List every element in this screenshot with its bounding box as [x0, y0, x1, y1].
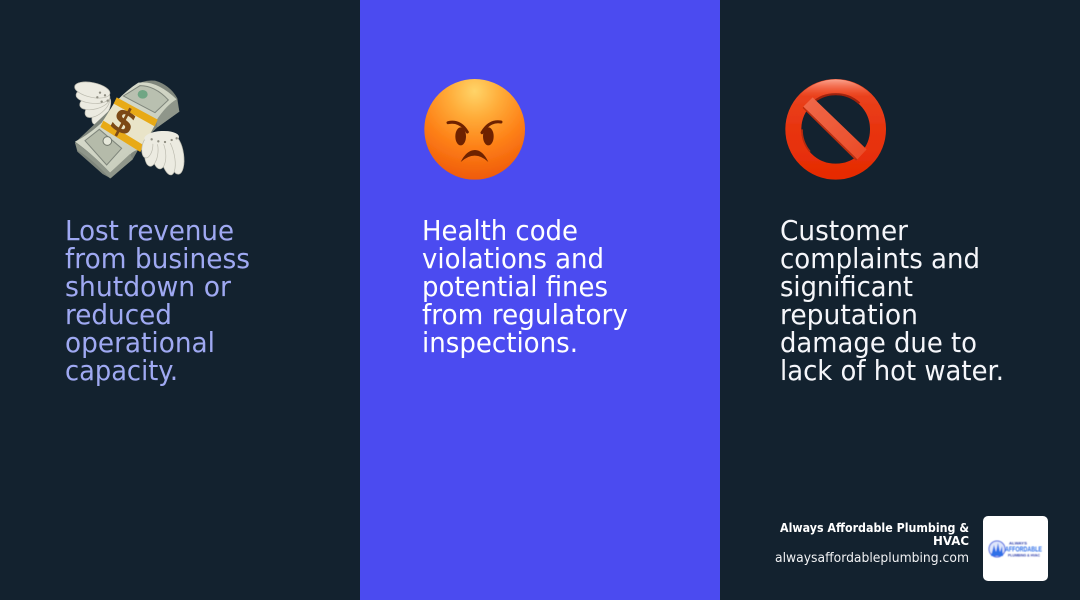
footer brand name: Always Affordable Plumbing & [780, 520, 969, 535]
text: health code violations [422, 215, 628, 359]
footer brand name: HVAC [933, 533, 969, 548]
text: lost revenue: reduced [65, 299, 172, 331]
text: lost revenue: capacity. [65, 355, 178, 387]
dollar mark: $ [103, 99, 143, 145]
text: health code violations: potential fines [422, 271, 608, 303]
logo mark: AFFORDABLE [1005, 546, 1042, 554]
logo mark [989, 540, 1042, 558]
text: customer complaints: complaints and [780, 243, 980, 275]
text: customer complaints: lack of hot water. [780, 355, 1004, 387]
text: health code violations: violations and [422, 243, 604, 275]
text: health code violations: inspections. [422, 327, 578, 359]
text: health code violations: from regulatory [422, 299, 628, 331]
text: lost revenue: operational [65, 327, 215, 359]
text: lost revenue [65, 215, 250, 387]
eyes [455, 127, 466, 145]
text: health code violations: Health code [422, 215, 578, 247]
background: middle panel [360, 0, 720, 600]
lower wing coverts [144, 130, 179, 145]
text: lost revenue: shutdown or [65, 271, 232, 303]
text: customer complaints [780, 215, 1004, 387]
mouth [461, 150, 488, 162]
icon: money with wings [73, 79, 186, 178]
text: lost revenue: Lost revenue [65, 215, 234, 247]
footer website: alwaysaffordableplumbing.com [775, 551, 969, 566]
text: lost revenue: from business [65, 243, 250, 275]
text: customer complaints: significant [780, 271, 913, 303]
logo card [983, 516, 1048, 581]
background: left panel [0, 0, 360, 600]
text: customer complaints: damage due to [780, 327, 977, 359]
icon: prohibited sign [793, 79, 878, 172]
band [102, 100, 157, 150]
logo mark: PLUMBING & HVAC [1008, 554, 1040, 558]
logo mark: ALWAYS [1009, 540, 1027, 546]
lower wing [140, 135, 186, 176]
text: customer complaints: Customer [780, 215, 909, 247]
footer brand name [780, 520, 969, 548]
text: customer complaints: reputation [780, 299, 918, 331]
brows [448, 122, 467, 132]
icon: angry face [424, 79, 525, 180]
background: right panel [720, 0, 1080, 600]
